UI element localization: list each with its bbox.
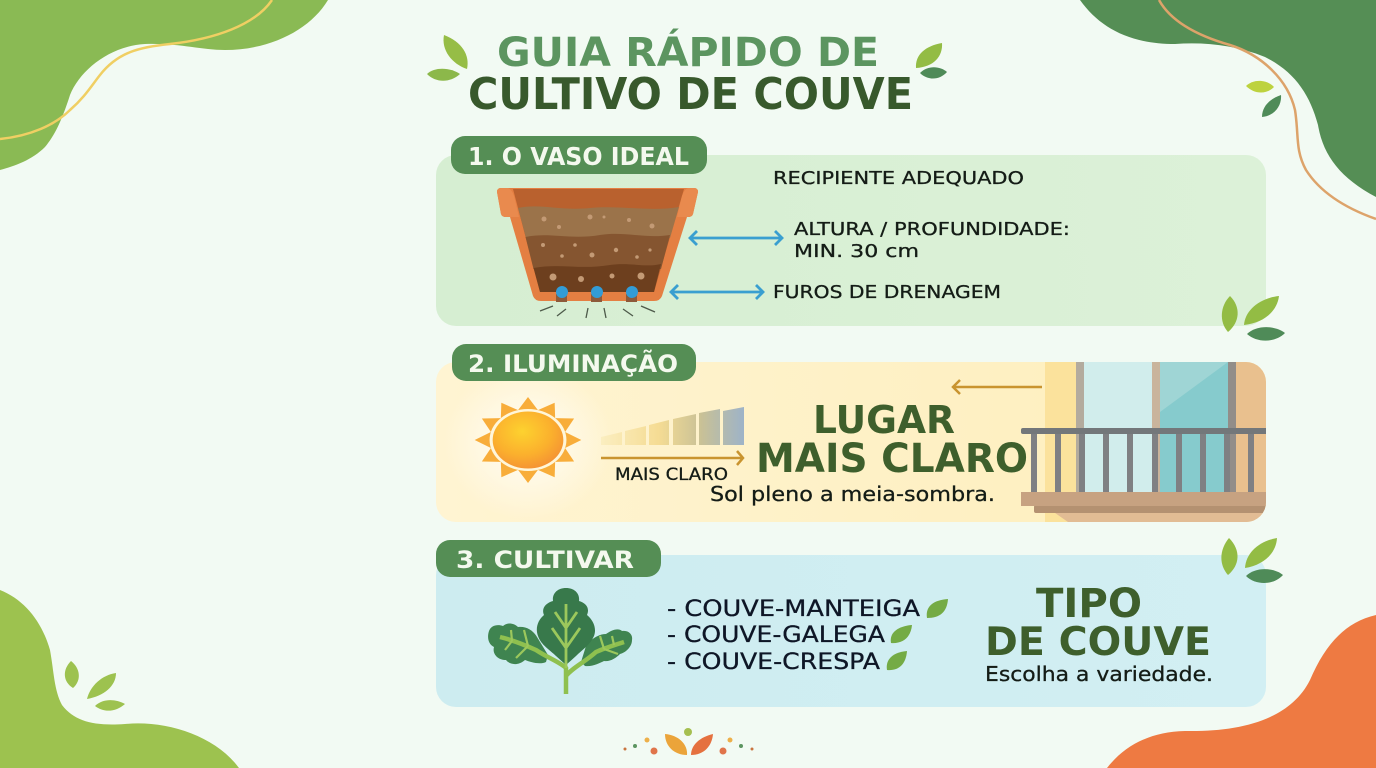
corner shape: bottom right bbox=[1107, 615, 1376, 768]
text: altura / profundidade: MIN. 30 cm bbox=[794, 241, 919, 262]
icon: sun bbox=[475, 397, 581, 483]
leaves: panel 1 corner bbox=[1222, 296, 1285, 341]
section badge: 3 bbox=[436, 540, 661, 577]
section badge: 3: 3. CULTIVAR bbox=[456, 546, 634, 574]
corner shape: top right bbox=[1080, 0, 1376, 219]
text: sol pleno: Sol pleno a meia-sombra. bbox=[710, 482, 995, 506]
section badge: 2: 2. ILUMINAÇÃO bbox=[468, 349, 678, 378]
illustration: balcony with window and railing bbox=[1021, 362, 1274, 522]
heading: lugar mais claro: MAIS CLARO bbox=[756, 436, 1028, 482]
heading: lugar mais claro: LUGAR bbox=[813, 398, 955, 442]
text: recipiente adequado: RECIPIENTE ADEQUADO bbox=[773, 168, 1024, 189]
text: altura / profundidade bbox=[794, 219, 1070, 262]
chart: brightness steps bbox=[601, 407, 744, 445]
title leaves: left bbox=[427, 35, 468, 81]
list: couve varieties: - COUVE-CRESPA bbox=[667, 650, 880, 675]
arrow: from window bbox=[953, 380, 1042, 394]
panel: 1 o vaso ideal bbox=[436, 136, 1266, 326]
heading: tipo de couve: DE COUVE bbox=[985, 620, 1211, 665]
leaves: bottom left bbox=[65, 661, 125, 711]
decoration: bottom leaves and dots bbox=[624, 728, 754, 755]
text: altura / profundidade: ALTURA / PROFUNDIDADE: bbox=[794, 219, 1070, 240]
icons: small list leaves bbox=[887, 599, 948, 670]
section badge: 1 bbox=[451, 136, 707, 174]
title: CULTIVO DE COUVE bbox=[468, 69, 913, 120]
icon: kale plant bbox=[488, 588, 632, 694]
section badge: 1: 1. O VASO IDEAL bbox=[468, 142, 689, 171]
title bbox=[468, 28, 913, 120]
section badge: 2 bbox=[452, 344, 696, 381]
panel: 3 cultivar bbox=[436, 540, 1266, 707]
corner shape: top left bbox=[0, 0, 328, 170]
leaves: top right bbox=[1246, 81, 1281, 117]
list: couve varieties: - COUVE-GALEGA bbox=[667, 623, 885, 648]
text: furos de drenagem: FUROS DE DRENAGEM bbox=[773, 282, 1001, 303]
label: mais claro: MAIS CLARO bbox=[615, 465, 728, 484]
arrow: mais claro bbox=[601, 451, 743, 465]
list: couve varieties: - COUVE-MANTEIGA bbox=[667, 597, 920, 622]
heading: lugar mais claro bbox=[756, 398, 1028, 482]
panel: 2 iluminacao bbox=[436, 344, 1274, 522]
title leaves: right bbox=[916, 43, 947, 79]
arrow: drainage bbox=[671, 285, 763, 299]
list: couve varieties bbox=[667, 597, 920, 675]
arrow: height bbox=[690, 231, 782, 245]
text: escolha a variedade: Escolha a variedade. bbox=[985, 662, 1213, 686]
title: GUIA RÁPIDO DE bbox=[497, 28, 879, 76]
icon: terracotta pot with soil layers bbox=[497, 188, 698, 318]
heading: tipo de couve bbox=[985, 581, 1211, 665]
corner shape: bottom left bbox=[0, 590, 239, 768]
leaves: panel 3 corner bbox=[1221, 538, 1283, 583]
heading: tipo de couve: TIPO bbox=[1036, 581, 1142, 627]
